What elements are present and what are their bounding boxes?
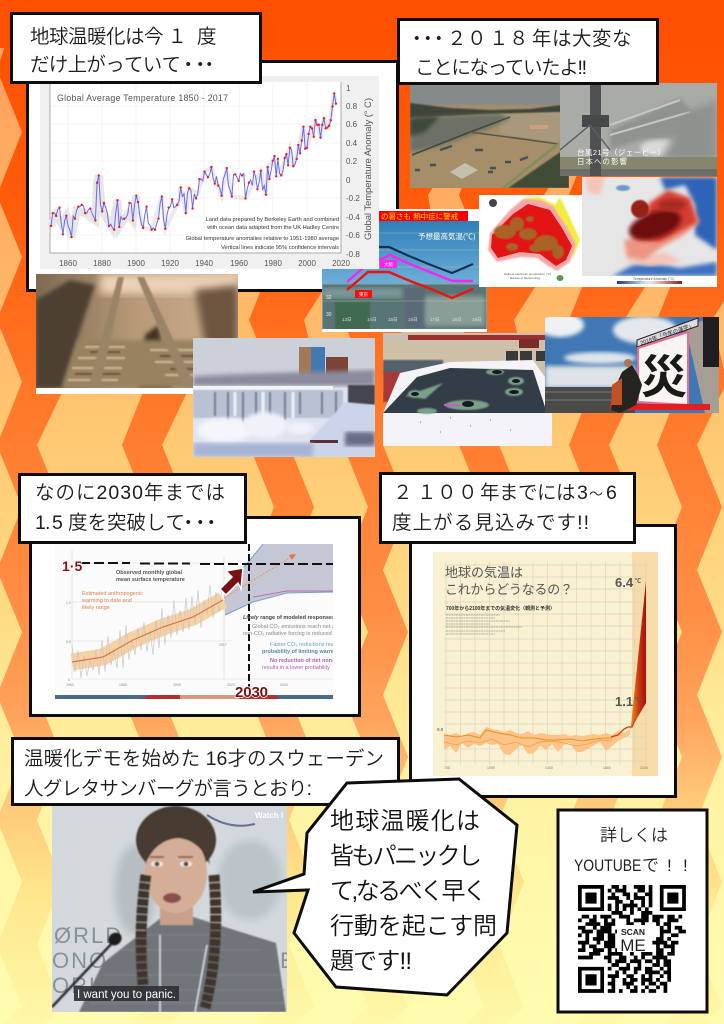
photo: Australia heat map: Highest maximum temperature (°C): [504, 272, 551, 276]
photo: Greta Thunberg speaking: E: [280, 948, 295, 973]
title: warming so far: 地球温暖化は今１度: [30, 26, 217, 48]
panel: temperature projection chart: 6.4: [615, 575, 634, 590]
photo: Tokyo heat forecast: 17日: [430, 317, 440, 323]
chart: global average temperature 1850-2017: -0.8: [346, 250, 360, 259]
panel: temperature projection chart: 0.0: [437, 727, 444, 732]
chart: global average temperature 1850-2017: -0.4: [346, 213, 360, 222]
speech bubble: 行動を起こす問: [330, 913, 497, 940]
panel: 1.5 degree chart: Global CO₂ emissions reach net zero: [252, 624, 342, 630]
panel: 1.5 degree chart: mean surface temperature: [116, 577, 185, 583]
title: what happened in 2018: [398, 20, 658, 84]
chart: global average temperature 1850-2017: Global Average Temperature 1850 - 2017: [57, 93, 228, 103]
chart: global average temperature 1850-2017: 1: [346, 84, 351, 93]
title: Greta intro: 人グレタサンバーグが言うとおり:: [24, 778, 312, 800]
speech bubble: [253, 779, 517, 995]
photo: Europe temperature anomaly map: Temperature Anomaly (°C): [633, 277, 674, 281]
speech bubble: 皆もパニックし: [330, 843, 482, 870]
chart: global average temperature 1850-2017: 0.4: [346, 139, 358, 148]
chart: global average temperature 1850-2017: 0.8: [346, 102, 358, 111]
panel: YouTube QR code: SCAN: [621, 927, 645, 937]
panel: 1.5 degree chart: 1·5: [62, 558, 82, 574]
title: 3 to 6 degrees by 2100: 度上がる見込みです!!: [392, 512, 589, 534]
panel: temperature projection chart: 1.1: [615, 694, 633, 709]
panel: 1.5 degree chart: 1.0: [66, 601, 71, 605]
title: 3 to 6 degrees by 2100: ２１００年までには: [393, 482, 576, 504]
panel: temperature projection chart: 2100: [640, 766, 648, 770]
chart: global average temperature 1850-2017: with ocean data adapted from the UK Hadley Centre: [206, 225, 339, 231]
chart: global average temperature 1850-2017: 1860: [59, 259, 77, 268]
chart: global average temperature 1850-2017: 1980: [264, 259, 282, 268]
title: 3 to 6 degrees by 2100: [380, 474, 634, 542]
photo: hail-damaged car: [383, 333, 552, 446]
panel: YouTube QR code: YOUTUBE: [574, 857, 641, 875]
photo: Tokyo heat forecast: 30: [326, 312, 332, 318]
photo: Greta Thunberg speaking: Watch I: [255, 811, 283, 820]
speech bubble: 地球温暖化は: [330, 808, 480, 835]
chart: global average temperature 1850-2017: 2020: [332, 259, 350, 268]
photo: Tokyo heat forecast: 16日: [408, 317, 418, 323]
chart: global average temperature 1850-2017: 0.2: [346, 157, 358, 166]
photo: kanji of the year: 災: [641, 341, 687, 407]
panel: YouTube QR code: !: [683, 856, 688, 875]
chart: global average temperature 1850-2017: [40, 76, 379, 269]
panel: temperature projection chart: 1000: [487, 766, 495, 770]
panel: 1.5 degree chart: Faster CO₂ reductions result: [270, 642, 340, 648]
photo: typhoon at bridge: [560, 83, 717, 176]
panel: YouTube QR code: で: [642, 856, 659, 875]
photo: Tokyo heat forecast: 32: [326, 295, 332, 301]
panel: temperature projection chart: 地球の気温は: [445, 565, 523, 580]
title: 1.5 degrees by 2030: 1.5度を突破して・・・: [35, 512, 221, 534]
QR code: [578, 885, 686, 993]
panel: 1.5 degree chart: 1980: [119, 683, 127, 687]
chart: global average temperature 1850-2017: Global Temperature Anomaly (° C): [363, 98, 374, 240]
panel: 1.5 degree chart: likely range: [82, 605, 110, 611]
photo: Tokyo heat forecast: 13日: [342, 317, 352, 323]
title: warming so far: だけ上がっていて・・・: [30, 54, 219, 76]
title: what happened in 2018: ことになっていたよ!!: [415, 57, 587, 79]
panel: 1.5 degree chart: 2000: [173, 683, 181, 687]
chart: global average temperature 1850-2017: 0.6: [346, 120, 358, 129]
photo: Tokyo heat forecast: 大阪: [384, 261, 393, 268]
photo: Tokyo heat forecast: 15日: [388, 317, 398, 323]
panel: global temperature chart frame: [28, 62, 398, 290]
photo: Tokyo heat forecast: 18日: [452, 317, 462, 323]
photo: Tokyo heat forecast: 14日: [367, 317, 377, 323]
photo: Greta Thunberg speaking: ØRLD: [54, 923, 123, 948]
panel: 1.5 degree chart: Estimated anthropogenic: [82, 591, 143, 597]
chart: global average temperature 1850-2017: 1880: [93, 259, 111, 268]
speech bubble: 題です!!: [330, 948, 412, 975]
photo: flooded town: [410, 85, 569, 188]
panel: 1.5 degree chart: 2020: [227, 683, 235, 687]
chart: global average temperature 1850-2017: 1960: [230, 259, 248, 268]
panel: temperature projection chart: 1400: [545, 766, 553, 770]
panel: 1.5 degree chart: 2040: [280, 683, 288, 687]
photo: Tokyo heat forecast: 19日: [472, 317, 482, 323]
panel: YouTube QR code: 詳しくは: [600, 826, 668, 845]
chart: global average temperature 1850-2017: 2000: [298, 259, 316, 268]
title: 3 to 6 degrees by 2100: ～: [589, 486, 603, 502]
chart: global average temperature 1850-2017: 1940: [195, 259, 213, 268]
panel: YouTube QR code: !: [667, 856, 672, 875]
panel: 1.5 degree chart: Likely range of modeled responses: [243, 615, 335, 621]
title: 3 to 6 degrees by 2100: 6: [606, 482, 617, 504]
title: 1.5 degrees by 2030: [20, 474, 246, 542]
photo: typhoon at bridge: 日本への影響: [577, 156, 628, 166]
panel: 1.5 degree chart: non-CO₂ radiative forcing is reduced: [243, 631, 332, 637]
photo: Greta Thunberg speaking: [52, 806, 295, 1012]
photo: Tokyo heat forecast: [322, 209, 487, 332]
chart: global average temperature 1850-2017: Global temperature anomalies relative to 1951-1980 average: [186, 236, 339, 242]
chart: global average temperature 1850-2017: 1920: [161, 259, 179, 268]
chart: global average temperature 1850-2017: -0.6: [346, 231, 360, 240]
panel: temperature projection chart: [410, 526, 676, 796]
panel: temperature projection chart: ℃: [635, 697, 641, 704]
photo: Australia heat map: [479, 195, 582, 287]
photo: Greta Thunberg speaking: I want you to panic.: [77, 989, 176, 1001]
panel: temperature projection chart: 700年から2100年までの気温変化（観測と予測）: [446, 605, 555, 612]
panel: 1.5 degree chart: results in a lower probability: [262, 665, 330, 671]
panel: 1.5 degree chart: 2017: [219, 643, 227, 647]
panel: 1.5 degree chart: 2030: [235, 684, 268, 701]
photo: Australia heat map: Bureau of Meteorology: [510, 276, 541, 280]
photo: Europe temperature anomaly map: [582, 177, 717, 287]
panel: 1.5 degree chart: warming to date and: [81, 598, 132, 604]
title: Greta intro: 温暖化デモを始めた 16才のスウェーデン: [24, 748, 384, 770]
photo: Greta Thunberg speaking: ORL: [52, 973, 103, 998]
chart: global average temperature 1850-2017: -0.2: [346, 194, 360, 203]
chart: global average temperature 1850-2017: Land data prepared by Berkeley Earth and combined: [206, 217, 339, 223]
photo: Tokyo heat forecast: 東京: [359, 291, 368, 298]
panel: YouTube QR code: ME: [620, 936, 646, 955]
panel: 1.5 degree chart: No reduction of net non-CO₂: [270, 658, 345, 664]
photo: frozen Niagara Falls: [193, 338, 375, 457]
panel: temperature projection chart: これからどうなるの？: [445, 582, 573, 597]
photo: typhoon at bridge: 台風21号（ジェービー）: [577, 147, 665, 157]
title: Greta intro: [12, 738, 398, 804]
panel: temperature projection chart: ℃: [635, 578, 641, 585]
photo: Tokyo heat forecast: 予想最高気温(℃): [418, 231, 476, 241]
photo: burned town: [36, 274, 238, 394]
panel: 1.5 degree chart: 0.5: [66, 640, 71, 644]
title: 3 to 6 degrees by 2100: 3: [577, 482, 588, 504]
chart: global average temperature 1850-2017: 1900: [127, 259, 145, 268]
title: what happened in 2018: ・・・２０１８年は大変な: [407, 28, 632, 50]
photo: kanji of the year: [536, 313, 719, 413]
title: warming so far: [12, 14, 260, 82]
panel: temperature projection chart: 1800: [603, 766, 611, 770]
panel: 1.5 degree chart: 1960: [66, 683, 74, 687]
photo: Greta Thunberg speaking: ONO: [52, 948, 108, 973]
photo: kanji of the year: 2018年「今年の漢字」: [639, 321, 695, 347]
panel: YouTube QR code: [558, 810, 707, 1012]
panel: 1.5 degree chart: Observed monthly global: [116, 570, 182, 576]
panel: 1.5 degree chart: 0: [68, 678, 70, 682]
speech bubble: て,なるべく早く: [330, 878, 487, 905]
chart: global average temperature 1850-2017: 0: [346, 176, 351, 185]
panel: 1.5 degree chart: probability of limiting warming: [262, 649, 342, 655]
title: 1.5 degrees by 2030: なのに2030年までは: [35, 482, 225, 504]
panel: 1.5 degree chart: [30, 518, 360, 716]
photo: Tokyo heat forecast: の暑さも 熱中症に警戒: [381, 211, 459, 221]
chart: global average temperature 1850-2017: Vertical lines indicate 95% confidence intervals: [221, 245, 339, 251]
panel: temperature projection chart: 700: [444, 766, 450, 770]
